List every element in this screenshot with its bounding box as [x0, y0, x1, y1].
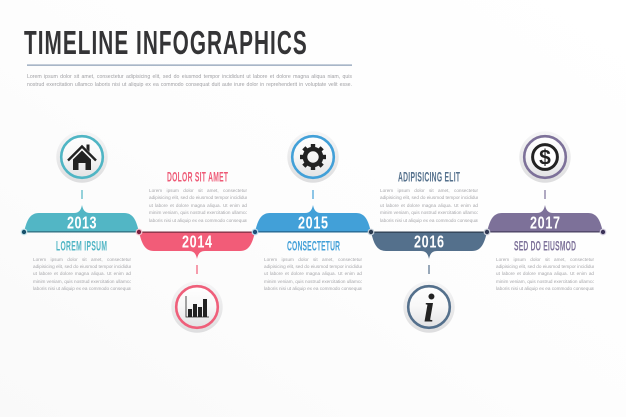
body text: minim veniam, quis nostrud exercitation ullamco — [264, 279, 362, 284]
body text: laboris nisi ut aliquip ex ea commodo consequat. — [33, 286, 131, 291]
connector stem — [544, 190, 546, 199]
icon: house badge — [56, 131, 108, 183]
body text: ut labore et dolore magna aliqua. Ut enim ad — [380, 203, 478, 208]
intro text: nostrud exercitation ullamco laboris nisi ut aliquip ex ea commodo consequat duit aute irure dolor in reprehenderit in voluptate velit esse. — [27, 82, 352, 88]
year tab — [371, 232, 487, 259]
body text: adipisicing elit, sed do eiusmod tempor incididunt — [149, 195, 247, 200]
panel: 2015 — [255, 131, 371, 294]
body text: Lorem ipsum dolor sit amet, consectetur — [149, 188, 247, 193]
connector stem — [196, 265, 198, 274]
body text — [149, 187, 247, 225]
panel: 2017 — [487, 131, 603, 294]
connector stem — [312, 190, 314, 199]
baseline — [487, 231, 603, 232]
body text: ut labore et dolore magna aliqua. Ut enim ad — [496, 271, 594, 276]
year: 2017 — [530, 214, 560, 233]
body text: ut labore et dolore magna aliqua. Ut enim ad — [33, 271, 131, 276]
icon: dollar badge: $ — [539, 146, 551, 170]
icon: gear badge — [287, 131, 339, 183]
body text: Lorem ipsum dolor sit amet, consectetur — [33, 256, 131, 262]
body text: Lorem ipsum dolor sit amet, consectetur — [380, 188, 478, 193]
body text: ut labore et dolore magna aliqua. Ut enim ad — [149, 203, 247, 208]
heading: ADIPISICING ELIT — [398, 170, 460, 185]
year tab — [487, 205, 603, 232]
body text: adipisicing elit, sed do eiusmod tempor incididunt — [264, 264, 362, 269]
panel: 2016 — [371, 170, 487, 333]
body text — [496, 256, 594, 294]
icon: dollar badge — [519, 131, 571, 183]
heading: LOREM IPSUM — [56, 239, 107, 254]
body text: adipisicing elit, sed do eiusmod tempor incididunt — [496, 264, 594, 269]
body text: minim veniam, quis nostrud exercitation ullamco — [380, 210, 478, 215]
baseline — [371, 232, 487, 233]
connector stem — [81, 190, 83, 199]
body text: minim veniam, quis nostrud exercitation ullamco — [33, 279, 131, 284]
body text: laboris nisi ut aliquip ex ea commodo consequat. — [380, 218, 478, 223]
body text — [33, 256, 131, 294]
year tab — [24, 205, 139, 232]
title: TIMELINE INFOGRAPHICS — [24, 24, 307, 61]
body text: adipisicing elit, sed do eiusmod tempor incididunt — [380, 195, 478, 200]
panel: 2013 — [24, 131, 139, 294]
year: 2013 — [67, 214, 97, 233]
heading: SED DO EIUSMOD — [514, 239, 576, 254]
baseline — [255, 231, 371, 232]
body text: laboris nisi ut aliquip ex ea commodo consequat. — [264, 286, 362, 291]
heading: DOLOR SIT AMET — [167, 170, 228, 185]
body text: laboris nisi ut aliquip ex ea commodo consequat. — [496, 286, 594, 291]
body text — [380, 187, 478, 225]
body text: minim veniam, quis nostrud exercitation ullamco — [149, 210, 247, 215]
icon: bar chart badge — [171, 281, 223, 333]
baseline — [24, 231, 139, 232]
title underline — [27, 65, 352, 66]
body text: ut labore et dolore magna aliqua. Ut enim ad — [264, 271, 362, 276]
body text: minim veniam, quis nostrud exercitation ullamco — [496, 279, 594, 284]
baseline — [139, 232, 255, 233]
icon: info badge: i — [423, 286, 435, 330]
connector stem — [428, 265, 430, 274]
year tab — [139, 232, 255, 259]
body text — [264, 256, 362, 294]
intro text — [27, 73, 352, 90]
intro text: Lorem ipsum dolor sit amet, consectetur adipisicing elit, sed do eiusmod tempor incididunt ut labore et dolore magna aliqua niam, quis — [27, 74, 352, 80]
body text: laboris nisi ut aliquip ex ea commodo consequat. — [149, 218, 247, 223]
panel: 2014 — [139, 170, 255, 333]
icon: info badge — [403, 281, 455, 333]
year: 2014 — [182, 233, 212, 252]
body text: Lorem ipsum dolor sit amet, consectetur — [496, 256, 594, 262]
year: 2016 — [414, 233, 444, 252]
heading: CONSECTETUR — [287, 239, 340, 254]
year tab — [255, 205, 371, 232]
timeline nodes — [21, 229, 606, 235]
body text: adipisicing elit, sed do eiusmod tempor incididunt — [33, 264, 131, 269]
body text: Lorem ipsum dolor sit amet, consectetur — [264, 256, 362, 262]
year: 2015 — [298, 214, 328, 233]
